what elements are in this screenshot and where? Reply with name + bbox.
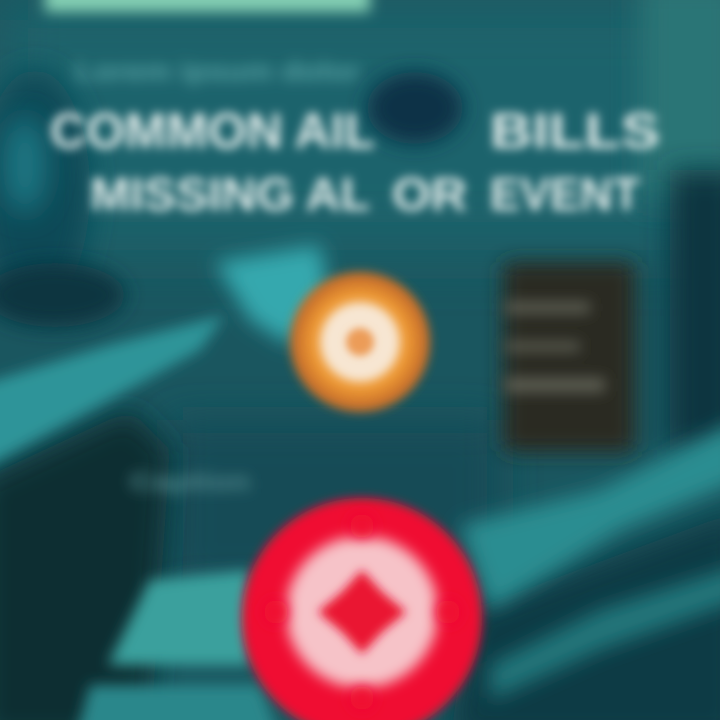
- title: MISSING AL: [90, 168, 370, 220]
- title: BILLS: [490, 103, 660, 159]
- brown panel: [503, 262, 635, 452]
- subtitle: Lorem ipsum dolor: [75, 56, 360, 86]
- red target icon: [242, 498, 482, 720]
- panel text lines: [505, 302, 605, 392]
- title: COMMON AIL: [50, 103, 375, 159]
- dark foreground lower right: [450, 510, 720, 720]
- title: OR: [392, 168, 467, 220]
- dark foreground lower left: [0, 410, 170, 720]
- teal band right: [460, 420, 720, 610]
- title: [50, 103, 660, 220]
- top light bar: [45, 0, 370, 12]
- small caption: Caption: [130, 469, 250, 496]
- teal band lower right: [490, 565, 720, 700]
- teal band left: [0, 315, 225, 470]
- teal block bottom left: [108, 570, 250, 665]
- ring notches: [264, 514, 460, 710]
- orange target icon: [290, 272, 430, 412]
- title: EVENT: [490, 168, 640, 220]
- teal glow behind orange circle: [215, 245, 330, 345]
- teal strip bottom: [75, 685, 280, 720]
